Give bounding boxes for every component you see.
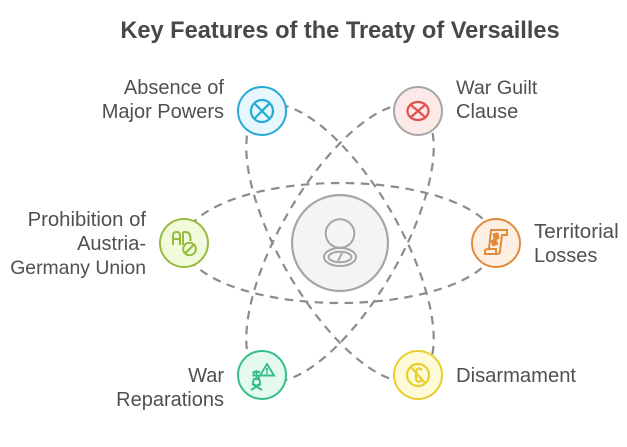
atom orbit diagram [184,78,496,408]
label: War Reparations: War [188,365,224,387]
node: Disarmament [394,351,576,399]
label: Disarmament: Disarmament [456,365,576,387]
icon: map scroll [485,230,507,254]
icon: prohibited sign [407,364,429,386]
label: War Guilt Clause: War Guilt [456,77,538,99]
icon: AD with prohibition sign [173,232,196,255]
label: Absence of Major Powers: Major Powers [102,101,224,123]
node: Absence of Major Powers [102,77,286,135]
node: War Reparations [116,351,286,411]
label: Prohibition of Austria-Germany Union: Germany Union [10,257,146,279]
title: Key Features of the Treaty of Versailles [120,18,560,44]
label: Prohibition of Austria-Germany Union: Prohibition of [28,209,146,231]
icon: crossed circle blue [251,100,273,122]
label: Prohibition of Austria-Germany Union: Austria- [77,233,146,255]
center node: compact icon [292,195,388,291]
icon: crossed oval red [408,102,428,120]
icon: warning triangle and figure [251,364,274,390]
node: War Guilt Clause [394,77,538,135]
label: Absence of Major Powers: Absence of [124,77,224,99]
label: War Reparations: Reparations [116,389,224,411]
label: Territorial Losses: Losses [534,245,597,267]
label: War Guilt Clause: Clause [456,101,518,123]
node: Prohibition of Austria-Germany Union [10,209,208,279]
label: Territorial Losses: Territorial [534,220,619,243]
node: Territorial Losses [472,219,619,267]
